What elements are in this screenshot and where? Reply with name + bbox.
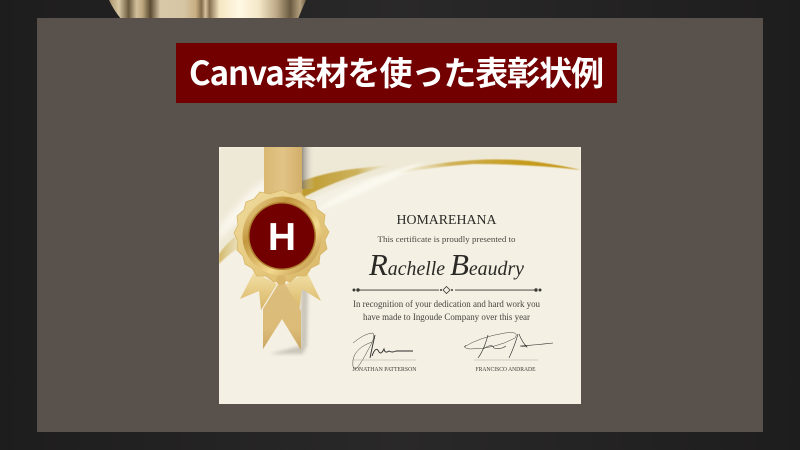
seal inner ring — [248, 202, 316, 270]
gold swoosh middle — [302, 166, 384, 198]
ornamental divider — [352, 286, 542, 294]
certificate paper — [219, 147, 581, 404]
rosette — [234, 190, 329, 282]
presented line: This certificate is proudly presented to — [378, 234, 516, 244]
organisation name: HOMAREHANA — [396, 213, 497, 228]
vertical ribbon bottom — [263, 283, 301, 350]
seal gold ring — [242, 196, 322, 276]
vertical ribbon top — [264, 147, 302, 194]
certificate — [219, 147, 581, 404]
left signatory name: JONATHAN PATTERSON — [352, 366, 417, 373]
title banner: Canva素材を使った表彰状例 — [189, 47, 604, 95]
ribbon tail left — [240, 272, 277, 310]
upper ribbon shadow — [302, 147, 315, 189]
recipient name: Rachelle Beaudry — [368, 247, 524, 282]
top cream band — [219, 147, 581, 258]
seal letter: H — [268, 216, 296, 259]
gold swoosh right — [398, 159, 581, 174]
gold swoosh left — [219, 236, 238, 264]
right signature — [464, 333, 553, 360]
lower ribbon shadow — [270, 285, 308, 354]
seal red disc — [250, 204, 314, 268]
pale swoosh under gold band — [326, 164, 418, 206]
trophy top behind panel — [109, 0, 306, 19]
right signatory name: FRANCISCO ANDRADE — [476, 366, 536, 373]
recognition text — [353, 299, 540, 323]
pale swoosh left of ribbon — [220, 180, 264, 237]
ribbon tail right — [286, 274, 321, 308]
left signature — [353, 333, 416, 369]
recognition text: have made to Ingoude Company over this year — [363, 312, 531, 323]
recognition text: In recognition of your dedication and hard work you — [353, 299, 540, 310]
rosette knot — [276, 275, 286, 285]
